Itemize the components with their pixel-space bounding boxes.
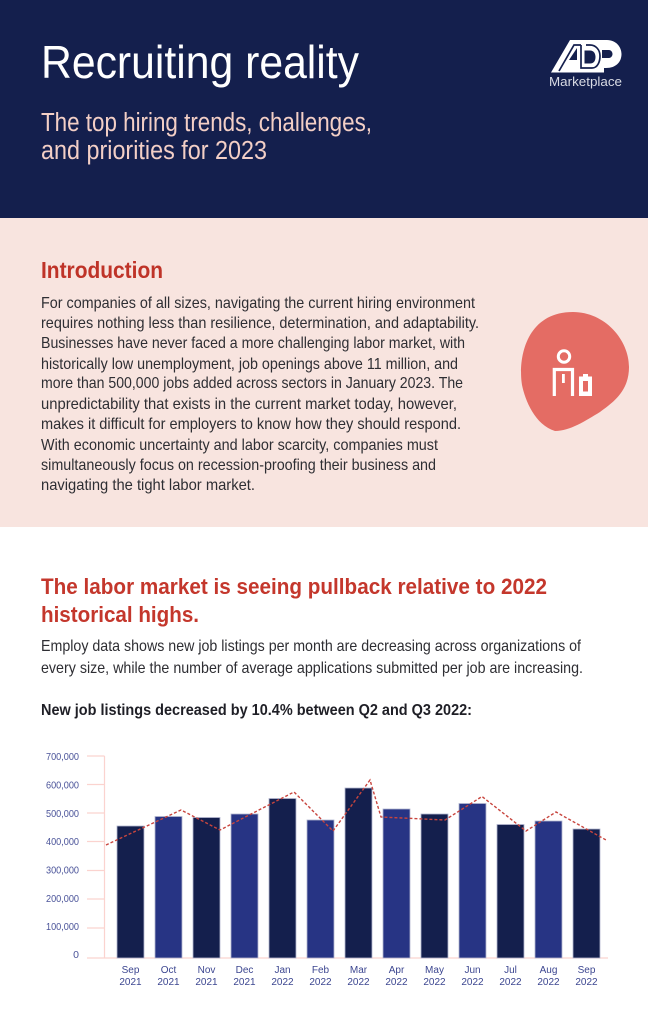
title: Recruiting reality: [41, 36, 359, 88]
text block: introduction body: navigating the tight labor market.: [41, 477, 255, 494]
x axis labels: 2022: [271, 977, 294, 988]
y axis: 100,000: [46, 921, 79, 933]
text block: employ data summary: every size, while the number of average applications submitted per job are increasing.: [41, 660, 583, 677]
x axis labels: 2021: [233, 977, 256, 988]
x axis labels: 2021: [157, 977, 180, 988]
x axis labels: Dec: [236, 965, 253, 976]
x axis labels: 2021: [195, 977, 218, 988]
heading: labor market pullback: The labor market is seeing pullback relative to 2022: [41, 574, 547, 599]
x axis labels: 2022: [537, 977, 560, 988]
heading: labor market pullback: [41, 574, 547, 627]
subtitle: The top hiring trends, challenges,: [41, 109, 372, 137]
dashed trend line: [106, 780, 606, 845]
y axis: 400,000: [46, 836, 79, 848]
y axis: 300,000: [46, 864, 79, 876]
x axis labels: 2022: [461, 977, 484, 988]
x axis labels: 2022: [385, 977, 408, 988]
bar chart: new job listings per month: [46, 751, 608, 988]
x axis labels: May: [425, 965, 444, 976]
x axis labels: [119, 965, 598, 988]
y axis: 500,000: [46, 808, 79, 820]
x axis labels: 2022: [499, 977, 522, 988]
text block: introduction body: makes it difficult for employers to know how they should respond.: [41, 416, 461, 433]
subtitle: and priorities for 2023: [41, 137, 267, 165]
y axis: 0: [73, 949, 79, 961]
x axis labels: Nov: [198, 965, 215, 976]
text block: introduction body: With economic uncertainty and labor scarcity, companies must: [41, 437, 439, 454]
panel: introduction: [0, 218, 648, 527]
x axis labels: Feb: [312, 965, 330, 976]
subtitle: [41, 109, 372, 165]
x axis labels: Oct: [161, 965, 176, 976]
text block: introduction body: Businesses have never faced a more challenging labor market, with: [41, 335, 465, 352]
text block: introduction body: requires nothing less than resilience, determination, and adaptability.: [41, 315, 479, 332]
x axis labels: Jul: [504, 965, 517, 976]
x axis labels: Jan: [274, 965, 291, 976]
x axis labels: Sep: [122, 965, 140, 976]
heading: introduction: Introduction: [41, 257, 163, 283]
y axis: [46, 751, 608, 961]
bars: [117, 788, 600, 958]
x axis labels: Apr: [389, 965, 405, 976]
x axis labels: 2022: [423, 977, 446, 988]
icon: person and battery on coral blob: [521, 312, 629, 431]
y axis: 200,000: [46, 893, 79, 905]
text block: employ data summary: Employ data shows new job listings per month are decreasing across organizations of: [41, 638, 582, 655]
logo: ADP Marketplace: [549, 40, 622, 89]
text block: introduction body: historically low unemployment, job openings above 11 million, and: [41, 356, 458, 373]
x axis labels: 2022: [309, 977, 332, 988]
text block: employ data summary: [41, 638, 583, 677]
text block: introduction body: unpredictability that exists in the current market today, however,: [41, 396, 457, 413]
text block: introduction body: more than 500,000 jobs added across sectors in January 2023. The: [41, 375, 463, 392]
logo: ADP Marketplace: Marketplace: [549, 74, 622, 89]
panel: header: [0, 0, 648, 218]
x axis labels: Aug: [540, 965, 557, 976]
heading: labor market pullback: historical highs.: [41, 602, 199, 627]
x axis labels: 2022: [347, 977, 370, 988]
y axis: 600,000: [46, 780, 79, 792]
chart heading: New job listings decreased by 10.4% between Q2 and Q3 2022:: [41, 702, 472, 719]
x axis labels: Mar: [350, 965, 368, 976]
text block: introduction body: For companies of all sizes, navigating the current hiring environment: [41, 295, 476, 312]
x axis labels: Jun: [464, 965, 481, 976]
x axis labels: Sep: [578, 965, 596, 976]
x axis labels: 2022: [575, 977, 598, 988]
text block: introduction body: [41, 295, 479, 494]
x axis labels: 2021: [119, 977, 142, 988]
y axis: 700,000: [46, 751, 79, 763]
text block: introduction body: simultaneously focus on recession-proofing their business and: [41, 457, 436, 474]
